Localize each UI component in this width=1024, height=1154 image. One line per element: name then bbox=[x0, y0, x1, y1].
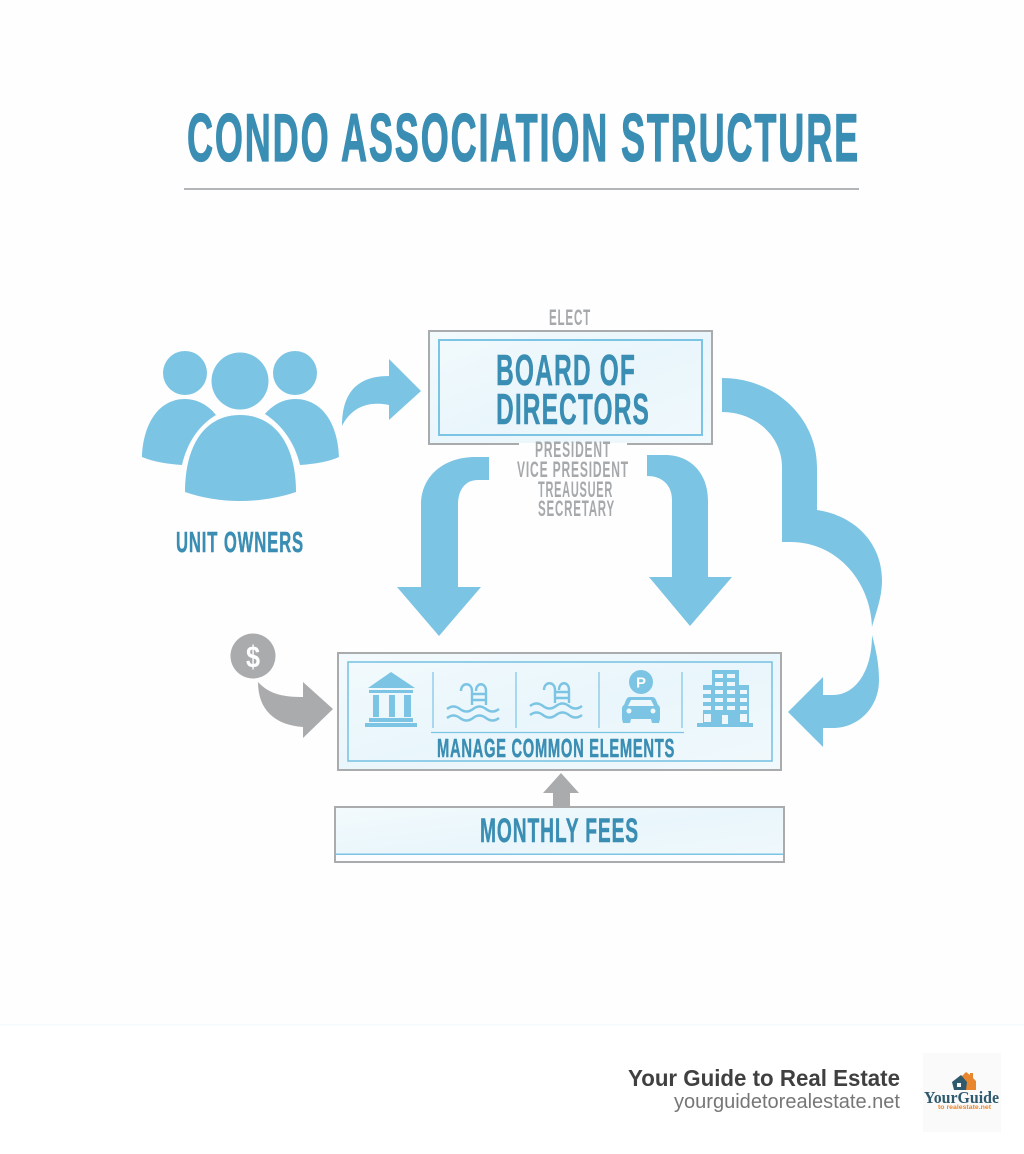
arrow: dollar to common elements bbox=[258, 682, 333, 738]
panel: manage common elements bbox=[338, 653, 781, 770]
icon: parking and car bbox=[622, 670, 660, 723]
icon: pool bbox=[447, 684, 499, 720]
panel: board of directors bbox=[429, 331, 712, 446]
text block: officers: TREAUSUER bbox=[538, 477, 613, 502]
text block: officers bbox=[517, 437, 629, 521]
panel: unit owners bbox=[142, 351, 339, 559]
arrow: fees up to common elements bbox=[543, 773, 579, 807]
icon: parking and car: P bbox=[636, 674, 646, 692]
heading: directors: DIRECTORS bbox=[496, 385, 650, 434]
logo bbox=[923, 1053, 1001, 1132]
arrow: board down right bbox=[647, 455, 732, 626]
label: elect: ELECT bbox=[549, 305, 591, 330]
heading: monthly fees: MONTHLY FEES bbox=[480, 812, 639, 850]
text block: officers: PRESIDENT bbox=[535, 437, 611, 462]
icon: bank bbox=[365, 672, 417, 727]
icon: dollar coin: $ bbox=[246, 639, 260, 674]
icon: pool bbox=[530, 683, 582, 718]
text block: officers: SECRETARY bbox=[538, 496, 615, 521]
footer brand name: Your Guide to Real Estate bbox=[628, 1065, 900, 1091]
icon: group of people bbox=[142, 351, 339, 501]
panel: monthly fees bbox=[335, 807, 784, 862]
arrow: board to common elements, right bbox=[722, 378, 882, 747]
heading: manage common elements: MANAGE COMMON ELEMENTS bbox=[437, 733, 675, 763]
arrow: owners to board bbox=[342, 359, 421, 426]
logo: YourGuide bbox=[924, 1088, 999, 1107]
icon: dollar coin bbox=[230, 634, 276, 678]
heading: board of: BOARD OF bbox=[496, 346, 636, 395]
text block: officers: VICE PRESIDENT bbox=[517, 457, 629, 482]
footer url: yourguidetorealestate.net bbox=[674, 1090, 900, 1113]
label: unit owners: UNIT OWNERS bbox=[176, 527, 304, 559]
icon: building bbox=[697, 670, 753, 727]
logo: to realestate.net bbox=[938, 1104, 992, 1111]
arrow: board down left bbox=[397, 457, 489, 636]
